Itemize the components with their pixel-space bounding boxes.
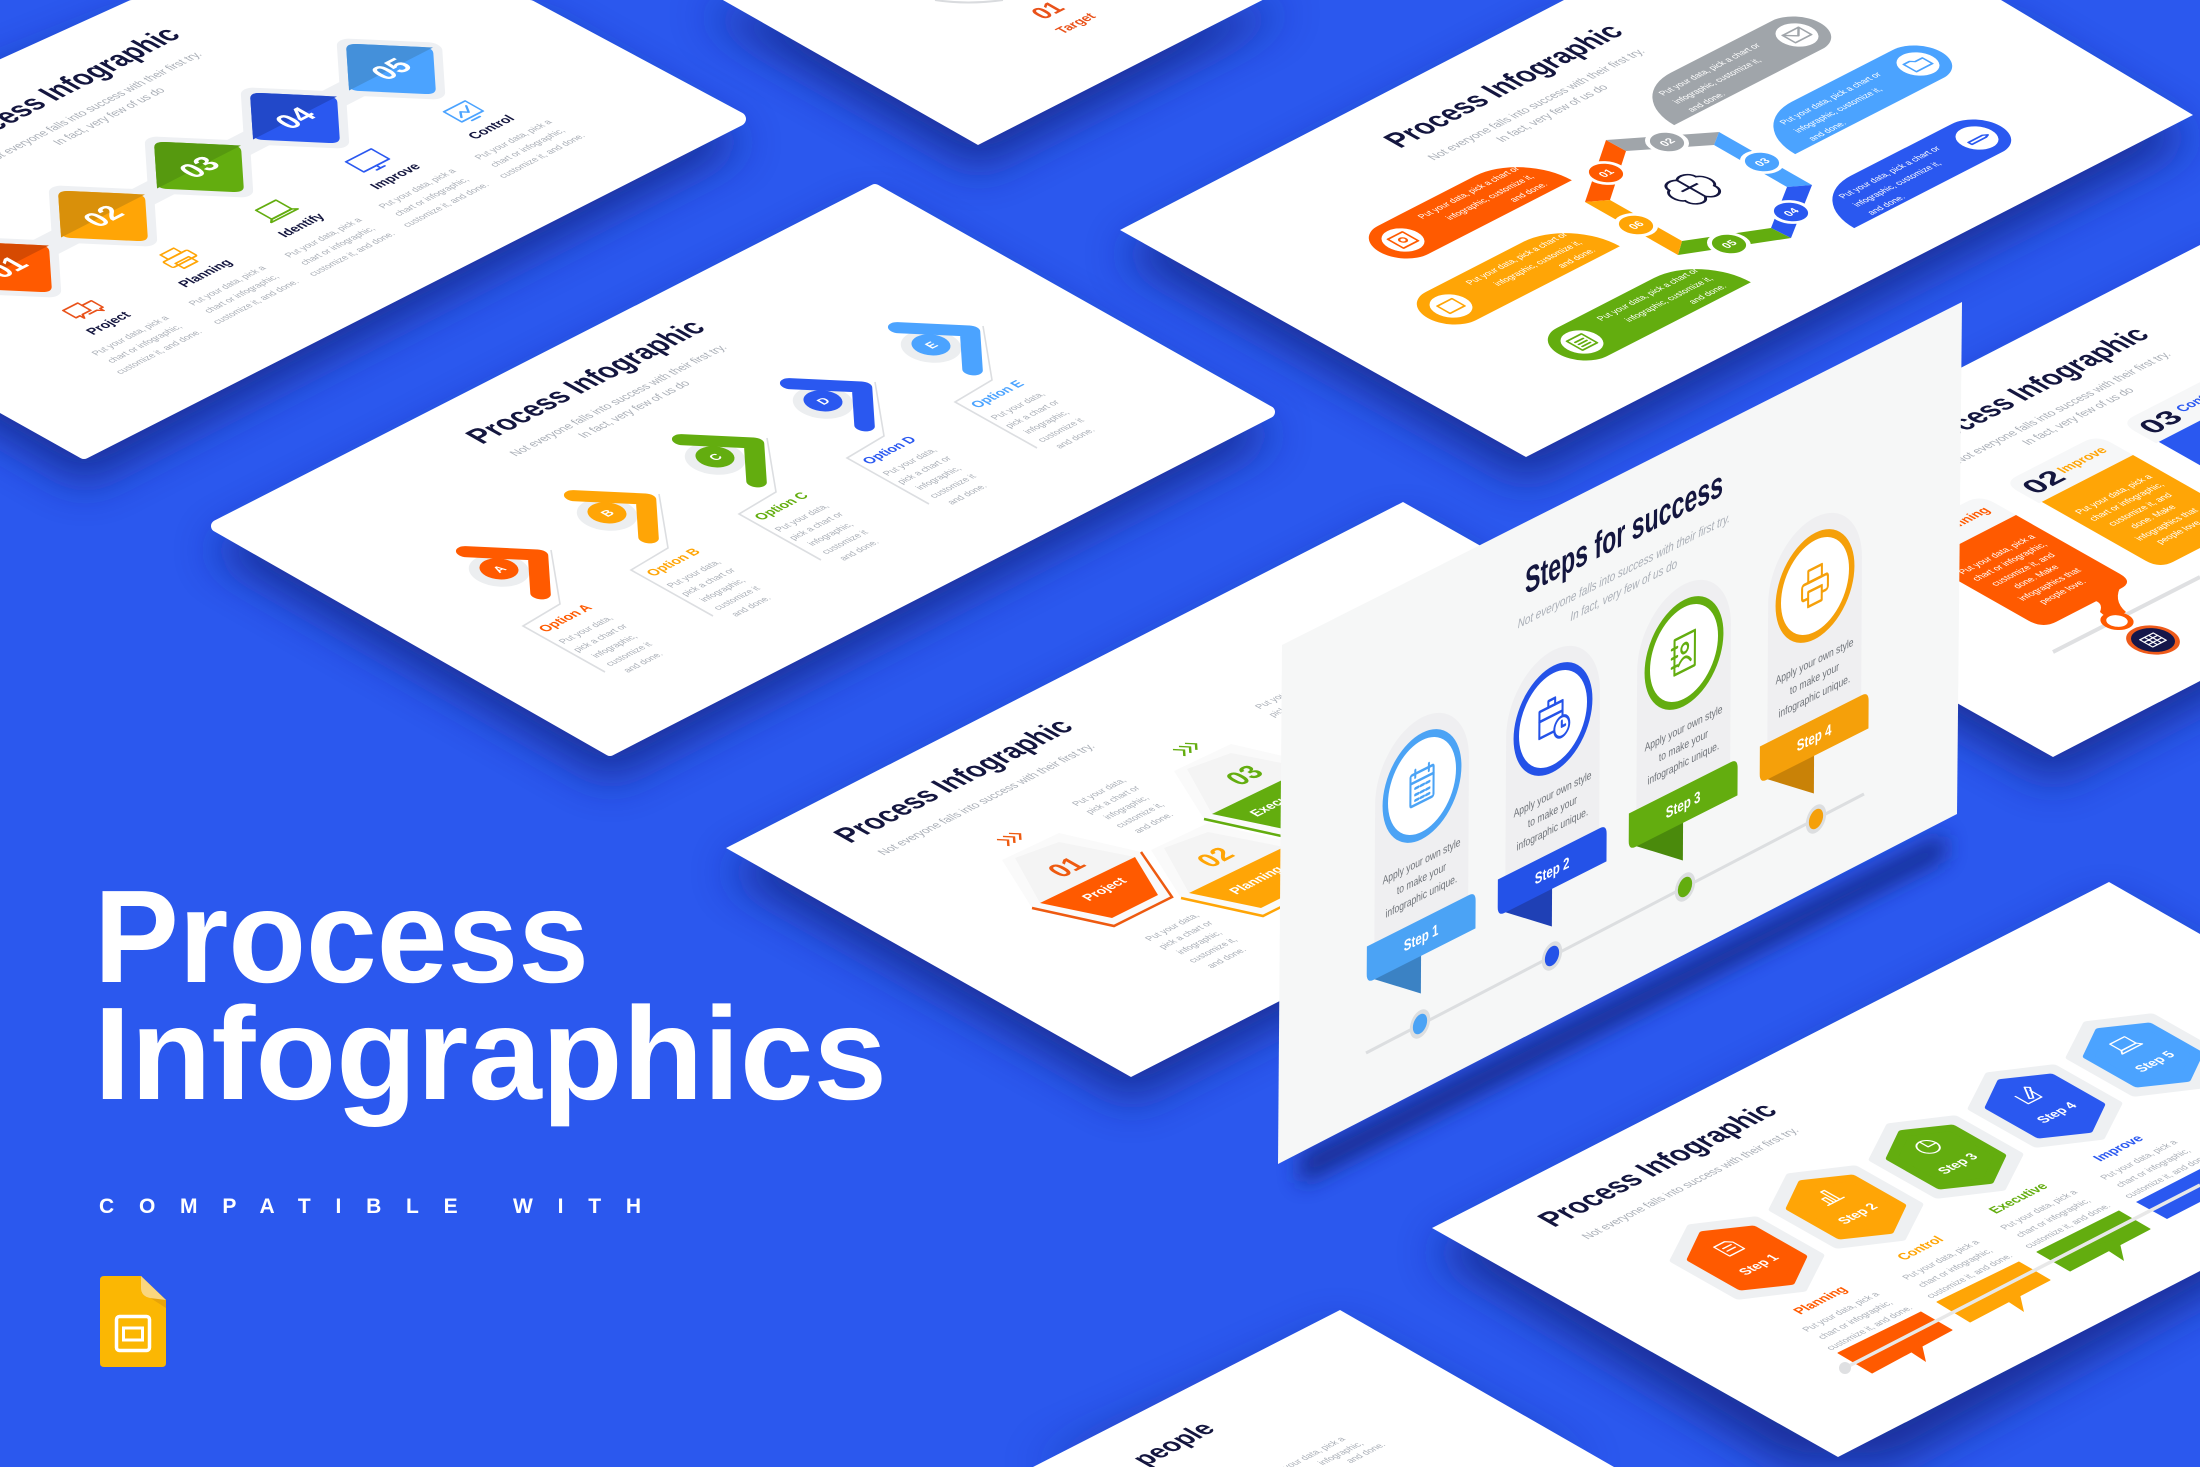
- option D: [770, 366, 997, 510]
- card 02: Put your data, pick a: [2072, 472, 2155, 516]
- card 01 connector ring: [2092, 584, 2136, 631]
- diamond 01: [0, 210, 112, 324]
- text: upper body 2: customize it,: [1295, 704, 1350, 732]
- step 1: Step 1: [1404, 921, 1439, 956]
- step 2: to make your: [1528, 793, 1577, 831]
- step 2: infographic unique.: [1516, 805, 1588, 854]
- item: control: Control: [464, 113, 518, 141]
- diamond 05: 05: [364, 54, 420, 85]
- text: upper body 2: [1252, 679, 1366, 741]
- card 01: chart or infographic,: [1969, 540, 2049, 582]
- hexagon step 4: [1951, 1055, 2139, 1157]
- hex card 01: Project: [1078, 875, 1131, 903]
- pill: gray: [1624, 9, 1845, 125]
- title: [94, 863, 887, 1127]
- pill: sky: Put your data, pick a chart or: [1777, 71, 1884, 126]
- text: upper body: customize it,: [1112, 801, 1167, 829]
- step 4: infographic unique.: [1778, 672, 1850, 721]
- option E: infographic,: [1020, 408, 1072, 435]
- timeline dot 1: [1410, 1005, 1430, 1043]
- card 02: done. Make: [2127, 503, 2178, 530]
- text: planning: customize it, and done.: [1823, 1304, 1915, 1352]
- heading: In fact, very few of us do: [1570, 555, 1678, 625]
- panel: diamond steps slide: [0, 7, 746, 484]
- heading: [1518, 459, 1730, 651]
- target label: [1022, 0, 1100, 36]
- target label: Target: [1052, 11, 1100, 36]
- option B: B: [597, 508, 618, 519]
- heading: Process Infographic: [458, 316, 714, 448]
- node 01: [1578, 158, 1634, 188]
- text: upper body 2: and done.: [1313, 714, 1359, 738]
- heading: Steps for success: [1525, 462, 1723, 603]
- card 01: infographics that: [2015, 566, 2084, 602]
- card 02: customize it, and: [2105, 491, 2175, 527]
- bar: executive: [2037, 1211, 2150, 1271]
- text: executive: [1970, 1173, 2113, 1250]
- option B: Put your data,: [664, 558, 723, 589]
- card 03: 03: [2131, 406, 2190, 438]
- hexagon step 1: [1653, 1207, 1841, 1309]
- text: upper body 2: infographic,: [1283, 697, 1334, 724]
- node 03: 03: [1752, 157, 1773, 168]
- option A: Put your data,: [556, 614, 615, 645]
- hexagon step 3: [1852, 1106, 2040, 1208]
- item: control: customize it, and done.: [495, 132, 587, 179]
- panel: people slide: [1033, 1310, 1614, 1467]
- node 05: [1701, 229, 1757, 259]
- panel: steps for success slide: [1278, 302, 1962, 1164]
- item: improve: Put your data, pick a: [375, 167, 459, 210]
- hex card 02: [1151, 823, 1321, 916]
- diamond 05: [286, 12, 496, 126]
- item: improve: customize it, and done.: [399, 181, 491, 228]
- step 2: Apply your own style: [1514, 768, 1592, 821]
- timeline: [1839, 1185, 2200, 1374]
- text: lower body: pick a chart or: [1155, 919, 1215, 950]
- item: identify: Put your data, pick a: [281, 216, 365, 259]
- pill: orange: and done.: [1507, 181, 1550, 203]
- node 06: [1608, 210, 1664, 240]
- title: Infographics: [94, 980, 887, 1127]
- option D: Option D: [858, 434, 920, 466]
- item: improve: chart or infographic,: [391, 176, 471, 217]
- node 02: 02: [1657, 137, 1678, 148]
- card 02: [2003, 435, 2200, 570]
- item: identify: Identify: [274, 211, 329, 239]
- pill: sky: and done.: [1806, 120, 1849, 142]
- text: executive: customize it, and done.: [2021, 1202, 2113, 1250]
- item: identify: chart or infographic,: [297, 225, 377, 266]
- hexagon step 2: Step 2: [1834, 1201, 1881, 1226]
- item: control: chart or infographic,: [487, 127, 567, 168]
- option E: E: [922, 340, 942, 351]
- option C: infographic,: [804, 520, 856, 547]
- heading: Not everyone falls into success with their first try.: [1518, 510, 1730, 632]
- node 01: 01: [1596, 168, 1617, 179]
- item: planning: [126, 230, 301, 325]
- heading: In fact, very few of us do: [50, 85, 169, 147]
- card 01: [1886, 495, 2134, 630]
- hexagon step 2: [1752, 1156, 1940, 1258]
- text: improve: chart or infographic,: [2112, 1147, 2193, 1189]
- node 06: 06: [1626, 220, 1647, 231]
- text: executive: chart or infographic,: [2012, 1197, 2093, 1239]
- text: control: customize it, and done.: [1923, 1252, 2015, 1300]
- pill: green: [1534, 254, 1751, 368]
- text: upper body 2: Put your data,: [1252, 679, 1312, 710]
- text: lower body: and done.: [1203, 946, 1249, 970]
- text: control: [1872, 1223, 2015, 1300]
- pill: sky: infographic, customize it,: [1791, 86, 1884, 134]
- step 4: Apply your own style: [1776, 635, 1854, 688]
- text: control: chart or infographic,: [1914, 1247, 1995, 1289]
- panel: options slide: [209, 190, 1277, 780]
- heading: Not everyone falls into success with their first try.: [1951, 350, 2174, 465]
- text: control: Control: [1893, 1234, 1947, 1262]
- pill: amber: infographic, customize it,: [1491, 239, 1584, 287]
- bar: control: [1937, 1262, 2050, 1322]
- item: project: customize it, and done.: [112, 328, 204, 375]
- option B: pick a chart or: [678, 566, 738, 597]
- hex card 01: [1002, 833, 1172, 926]
- steps slide shadow: [1300, 833, 1945, 1185]
- step 3: [1628, 557, 1739, 888]
- pill: orange: infographic, customize it,: [1443, 173, 1536, 221]
- text: lower body: [1142, 911, 1256, 973]
- step 2: [1497, 623, 1608, 954]
- option D: Put your data,: [880, 446, 939, 477]
- hex card 02: 02: [1189, 843, 1242, 871]
- item: planning: chart or infographic,: [201, 273, 281, 314]
- option A: pick a chart or: [570, 622, 630, 653]
- pill: gray: and done.: [1685, 91, 1728, 113]
- option D: customize it: [926, 472, 979, 500]
- item: control: [413, 85, 587, 179]
- body fragment: and done.: [1342, 1441, 1388, 1464]
- text: lower body: Put your data,: [1142, 911, 1202, 942]
- option C: Option C: [750, 490, 812, 522]
- heading: Not everyone falls into success with their first try.: [875, 742, 1098, 857]
- node 04: [1763, 197, 1819, 227]
- item: project: Project: [82, 309, 135, 337]
- step 1: Apply your own style: [1383, 835, 1461, 888]
- heading: Process Infographic: [826, 715, 1082, 847]
- hexagon step 3: Step 3: [1934, 1151, 1981, 1176]
- step 3: to make your: [1659, 727, 1708, 765]
- pill: navy: infographic, customize it,: [1850, 160, 1943, 208]
- option D: pick a chart or: [894, 454, 954, 485]
- option E: Option E: [967, 378, 1028, 410]
- pill: orange: [1355, 152, 1572, 266]
- step 1: to make your: [1397, 860, 1446, 898]
- card 02: Improve: [2053, 445, 2111, 475]
- option A: A: [489, 564, 510, 575]
- text: improve: Improve: [2089, 1133, 2147, 1163]
- text: lower body: infographic,: [1173, 929, 1224, 956]
- step 4: Step 4: [1797, 721, 1832, 756]
- pill: amber: Put your data, pick a chart or: [1463, 231, 1570, 286]
- text: control: Put your data, pick a: [1899, 1238, 1982, 1281]
- diamond 02: [0, 159, 208, 273]
- option C: C: [705, 452, 726, 463]
- text: improve: Put your data, pick a: [2097, 1138, 2180, 1181]
- subtitle: compatible with: COMPATIBLE WITH: [99, 1195, 641, 1218]
- item: identify: [225, 184, 397, 277]
- step 3: Step 3: [1666, 788, 1701, 823]
- option B: [554, 478, 781, 622]
- pill: navy: [1804, 112, 2025, 228]
- card 03: [2120, 375, 2200, 510]
- panel: target slide: [700, 0, 1290, 169]
- step 2: Step 2: [1535, 854, 1570, 889]
- option C: pick a chart or: [786, 510, 846, 541]
- text: planning: Planning: [1789, 1284, 1851, 1316]
- pill: amber: [1403, 218, 1620, 332]
- step 3: Apply your own style: [1645, 702, 1723, 755]
- timeline: [2053, 577, 2200, 652]
- node 02: [1639, 127, 1695, 157]
- option B: Option B: [642, 546, 704, 578]
- item: planning: Planning: [174, 257, 236, 289]
- card 02: 02: [2014, 466, 2073, 498]
- option A: infographic,: [588, 632, 640, 659]
- panel: hexagon ring slide: [1120, 0, 2193, 481]
- panel: right cards slide: [1647, 245, 2200, 781]
- chart arc: [935, 0, 1003, 2]
- option A: [446, 534, 673, 678]
- text: upper body: [1069, 776, 1183, 838]
- item: improve: Improve: [366, 161, 424, 191]
- pill: gray: infographic, customize it,: [1670, 57, 1763, 105]
- item: project: chart or infographic,: [104, 323, 184, 364]
- heading: Not everyone falls into success with their first try.: [507, 343, 730, 458]
- option D: infographic,: [912, 464, 964, 491]
- panel: hex cards slide: [726, 502, 1808, 1101]
- card 01: Put your data, pick a: [1955, 532, 2038, 576]
- item: planning: Put your data, pick a: [185, 264, 269, 307]
- heading: Process Infographic: [1902, 323, 2158, 455]
- step 1: infographic unique.: [1385, 872, 1457, 921]
- panel: hexagon steps slide: [1432, 882, 2200, 1467]
- icon: green chevrons: [1173, 741, 1202, 756]
- option B: customize it: [710, 584, 763, 612]
- icon: brain: [1656, 170, 1728, 208]
- heading: Process Infographic: [1530, 1099, 1786, 1231]
- option E: Put your data,: [988, 390, 1047, 421]
- option B: and done.: [728, 594, 773, 618]
- text: executive: Executive: [1985, 1181, 2051, 1216]
- hexagon step 5: [2049, 1004, 2200, 1106]
- text: planning: chart or infographic,: [1814, 1299, 1895, 1341]
- heading: Not everyone falls into success with their first try.: [1425, 47, 1648, 162]
- card 01 icon: [2118, 621, 2188, 659]
- diamond 02: 02: [76, 201, 132, 232]
- option A: and done.: [620, 650, 665, 674]
- item: project: Put your data, pick a: [88, 314, 172, 357]
- hexagon step 1: Step 1: [1735, 1252, 1783, 1277]
- hex card 03: Executive: [1246, 784, 1312, 819]
- pill: orange: Put your data, pick a chart or: [1415, 165, 1522, 220]
- hex card 03: 03: [1218, 761, 1271, 789]
- option E: [878, 310, 1105, 454]
- option A: customize it: [602, 640, 655, 668]
- heading: Not everyone falls into success with their first try.: [1579, 1126, 1802, 1241]
- option D: and done.: [944, 482, 989, 506]
- pill: green: Put your data, pick a chart or: [1594, 267, 1701, 322]
- hex card 03: [1174, 744, 1344, 837]
- card 02: infographics that: [2132, 506, 2200, 542]
- timeline dot 2: [1542, 937, 1562, 975]
- timeline dot 4: [1806, 800, 1826, 838]
- heading: Process Infographic: [1376, 20, 1632, 152]
- item: project: [34, 283, 204, 375]
- step 3: infographic unique.: [1647, 739, 1719, 788]
- option C: [662, 422, 889, 566]
- diamond 03: [94, 110, 304, 224]
- timeline dot 3: [1675, 868, 1695, 906]
- item: planning: customize it, and done.: [209, 278, 301, 325]
- item: improve: [317, 134, 491, 228]
- option A: Option A: [535, 602, 596, 634]
- title: Process: [94, 863, 589, 1010]
- step 4: to make your: [1790, 660, 1839, 698]
- option E: and done.: [1052, 426, 1097, 450]
- diamond 03: 03: [172, 152, 228, 183]
- hexagon step 5: Step 5: [2131, 1049, 2179, 1074]
- item: identify: customize it, and done.: [305, 230, 397, 277]
- text: lower body: customize it,: [1185, 936, 1240, 964]
- diamond 04: [190, 61, 400, 175]
- body fragment: infographic,: [1315, 1440, 1366, 1466]
- pill: amber: and done.: [1555, 247, 1598, 269]
- icon: google slides: [100, 1276, 166, 1367]
- pill: navy: and done.: [1865, 194, 1908, 216]
- option C: and done.: [836, 538, 881, 562]
- text: upper body: pick a chart or: [1082, 784, 1142, 815]
- card 01: customize it, and: [1988, 551, 2058, 587]
- body fragment: [1279, 1427, 1388, 1467]
- pill: green: and done.: [1686, 283, 1729, 305]
- card 01: people love.: [2035, 578, 2089, 605]
- heading: In fact, very few of us do: [1493, 82, 1612, 144]
- card 01: done. Make: [2010, 563, 2061, 590]
- card 02: chart or infographic,: [2086, 480, 2166, 522]
- card 01: Planning: [1932, 505, 1994, 537]
- option B: infographic,: [696, 576, 748, 603]
- bar: planning: [1838, 1312, 1952, 1373]
- node 05: 05: [1719, 239, 1740, 250]
- node 03: [1734, 147, 1790, 177]
- option E: pick a chart or: [1002, 398, 1062, 429]
- step 1: [1366, 690, 1477, 1021]
- pill: navy: Put your data, pick a chart or: [1836, 145, 1943, 200]
- hexagon ring: [1585, 132, 1812, 255]
- option E: customize it: [1034, 416, 1087, 444]
- text: improve: [2070, 1123, 2200, 1200]
- node 04: 04: [1781, 206, 1803, 218]
- bar: improve: [2136, 1169, 2200, 1219]
- icon: orange chevrons: [997, 831, 1026, 846]
- diamond 04: 04: [268, 103, 325, 134]
- hex card 01: 01: [1040, 853, 1093, 881]
- text: upper body: infographic,: [1100, 794, 1151, 821]
- timeline: [1366, 794, 1864, 1053]
- step 4: [1759, 490, 1870, 821]
- heading: In fact, very few of us do: [575, 378, 694, 440]
- option C: Put your data,: [772, 502, 831, 533]
- hexagon step 4: Step 4: [2033, 1100, 2081, 1125]
- pill: gray: Put your data, pick a chart or: [1656, 42, 1763, 97]
- text: upper body: and done.: [1130, 811, 1176, 835]
- text: upper body 2: pick a chart or: [1265, 687, 1325, 718]
- pill: green: infographic, customize it,: [1622, 275, 1715, 323]
- text: planning: Put your data, pick a: [1799, 1290, 1882, 1333]
- item: control: Put your data, pick a: [471, 118, 555, 161]
- text: planning: [1772, 1275, 1915, 1352]
- hex card 02: Planning: [1225, 864, 1287, 896]
- option C: customize it: [818, 528, 871, 556]
- heading: In fact, very few of us do: [2019, 385, 2138, 447]
- text: executive: Put your data, pick a: [1997, 1188, 2080, 1231]
- text: upper body: Put your data,: [1069, 776, 1129, 807]
- option D: D: [813, 396, 834, 407]
- pill: sky: [1745, 38, 1966, 154]
